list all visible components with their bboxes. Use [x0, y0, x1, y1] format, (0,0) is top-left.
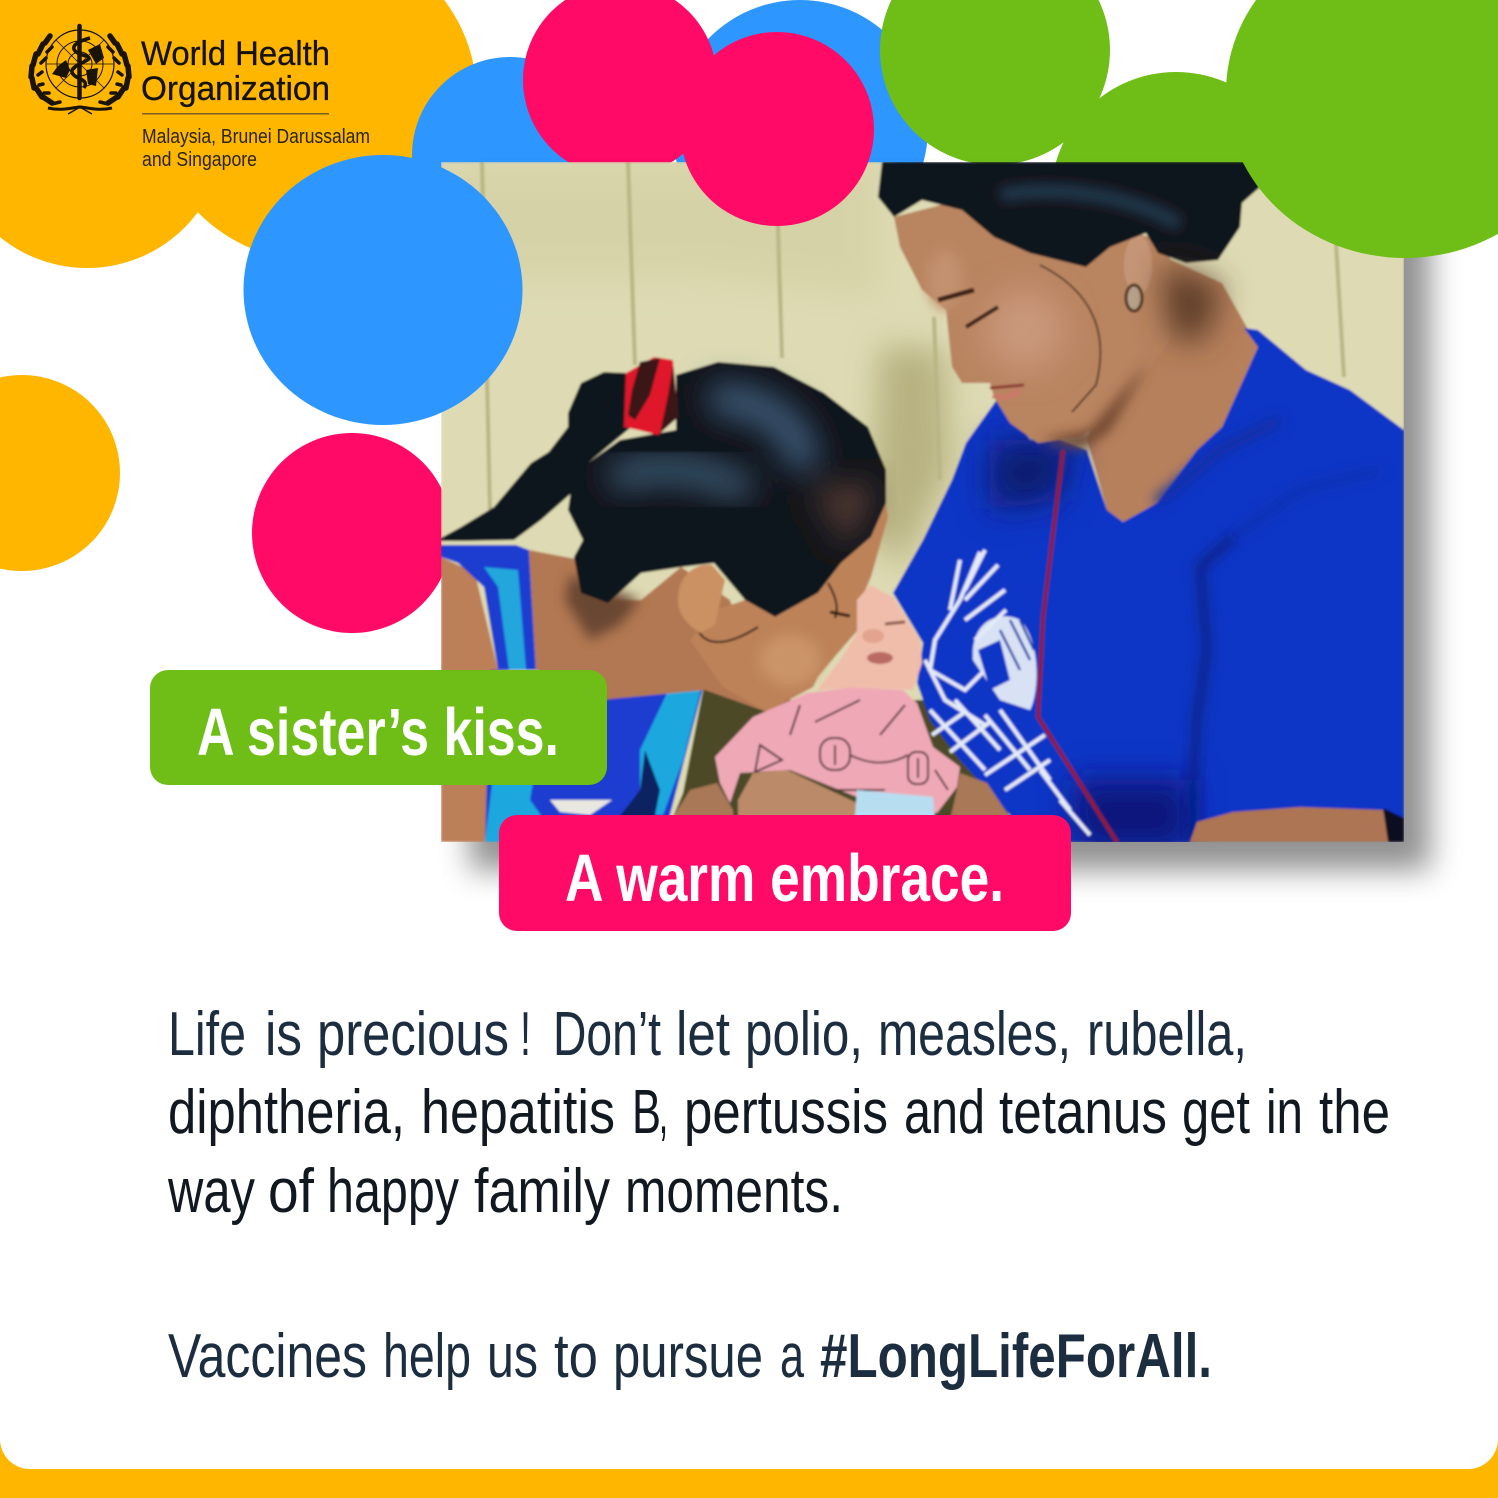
- pink circle left of photo: [252, 433, 452, 633]
- main message: hepatitis: [421, 1078, 615, 1147]
- main message: tetanus: [999, 1078, 1167, 1147]
- green circle top: [880, 0, 1110, 165]
- baby other arm: [945, 773, 1012, 842]
- main message: Don’t: [553, 1000, 661, 1069]
- mother hair highlights and nape wisps: [1000, 191, 1222, 412]
- main message: family: [474, 1157, 610, 1226]
- large green circle over photo: [1226, 0, 1498, 258]
- onesie sketch pattern: [755, 700, 948, 790]
- bottom yellow band with rounded white panel: [0, 1380, 1498, 1498]
- main message: precious: [317, 1000, 509, 1069]
- wall shading: [441, 162, 950, 570]
- photo: sister kissing baby held by mother: [441, 162, 1404, 850]
- pink label: A warm embrace: A warm embrace.: [565, 841, 1004, 916]
- main message: B: [632, 1078, 661, 1147]
- hashtag message: us: [487, 1322, 538, 1391]
- sister neck and back: [529, 550, 767, 712]
- main message: polio,: [745, 1000, 863, 1069]
- main message: in: [1266, 1078, 1303, 1147]
- sister arm: [441, 557, 498, 842]
- mother neck: [1087, 250, 1258, 522]
- pink circle over photo: [680, 32, 874, 226]
- dark background under chin and baby: [673, 688, 1010, 815]
- sister face: [690, 503, 888, 712]
- wall: [441, 162, 1404, 842]
- hashtag message: [168, 1322, 1212, 1391]
- main message: rubella,: [1087, 1000, 1247, 1069]
- dark corner under sleeve: [1383, 808, 1404, 842]
- neck shading: [565, 575, 640, 640]
- WHO name: Organization: [141, 70, 330, 108]
- main message: get: [1182, 1078, 1250, 1147]
- top blue circle behind photo: [672, 0, 928, 256]
- scrunchy: [624, 357, 678, 435]
- green label: A sister's kiss: [150, 670, 607, 785]
- mother earring: [1126, 285, 1142, 311]
- main message: way: [167, 1157, 255, 1226]
- hashtag message: to: [554, 1322, 598, 1391]
- mother hair: [878, 162, 1260, 267]
- baby mitten: [853, 790, 937, 842]
- shirt shading folds: [990, 420, 1380, 850]
- green circle middle: [1051, 72, 1301, 322]
- wall plank lines: [482, 162, 1344, 510]
- sister hair highlights: [610, 400, 860, 540]
- baby pink onesie: [715, 687, 960, 813]
- WHO name: World Health: [141, 35, 330, 73]
- main message: is: [265, 1000, 302, 1069]
- baby arm: [736, 769, 858, 815]
- main message: happy: [327, 1157, 459, 1226]
- sister top lower section: [485, 670, 705, 842]
- hashtag message: pursue: [613, 1322, 763, 1391]
- baby head: [817, 585, 922, 690]
- braid: [441, 440, 590, 541]
- hashtag message: a: [780, 1322, 804, 1391]
- yellow circles top left: [0, 0, 477, 268]
- main message: diphtheria,: [168, 1078, 405, 1147]
- hashtag message: Vaccines: [168, 1322, 367, 1391]
- sister hand: [673, 782, 735, 815]
- face highlights and shading: [927, 250, 1150, 450]
- main message: let: [676, 1000, 730, 1069]
- main message: the: [1319, 1078, 1390, 1147]
- main message: ,: [659, 1078, 668, 1147]
- cheek highlight, eye and hair strands: [698, 583, 850, 685]
- pink circle behind photo: [523, 0, 717, 177]
- mother ear: [1124, 235, 1152, 295]
- small blue circle behind photo: [412, 57, 608, 253]
- sister blue top strap: [441, 545, 536, 670]
- mother eyebrow, eye and mouth: [938, 290, 1024, 397]
- hair bun: [548, 372, 630, 463]
- hashtag message: #LongLifeForAll.: [820, 1322, 1212, 1391]
- mother face: [894, 200, 1170, 443]
- sister blue top inner cyan: [484, 567, 526, 670]
- photo drop shadow: [470, 190, 1430, 870]
- baby features: [862, 622, 905, 664]
- main message: Life: [168, 1000, 246, 1069]
- pink label: A warm embrace: [499, 815, 1071, 931]
- main message: measles,: [878, 1000, 1071, 1069]
- green label: A sister's kiss: A sister’s kiss.: [197, 695, 559, 770]
- main message: !: [520, 1000, 531, 1069]
- WHO office region: and Singapore: [142, 149, 257, 171]
- sister ear: [678, 565, 725, 633]
- hashtag message: help: [383, 1322, 471, 1391]
- WHO office region: Malaysia, Brunei Darussalam: [142, 126, 370, 148]
- yellow circle left edge: [0, 375, 120, 571]
- white floral pattern on shirt: [925, 550, 1090, 835]
- mother necklace cord: [1038, 450, 1117, 842]
- WHO emblem: [31, 26, 129, 114]
- main message: of: [268, 1157, 315, 1226]
- main message: pertussis: [684, 1078, 888, 1147]
- main message: and: [904, 1078, 985, 1147]
- mother shirt: [893, 328, 1404, 842]
- large blue circle over photo: [244, 155, 522, 425]
- main message: moments.: [625, 1157, 843, 1226]
- WHO logo block: [31, 26, 376, 171]
- sister hair: [568, 362, 886, 617]
- mother arm: [1190, 807, 1390, 842]
